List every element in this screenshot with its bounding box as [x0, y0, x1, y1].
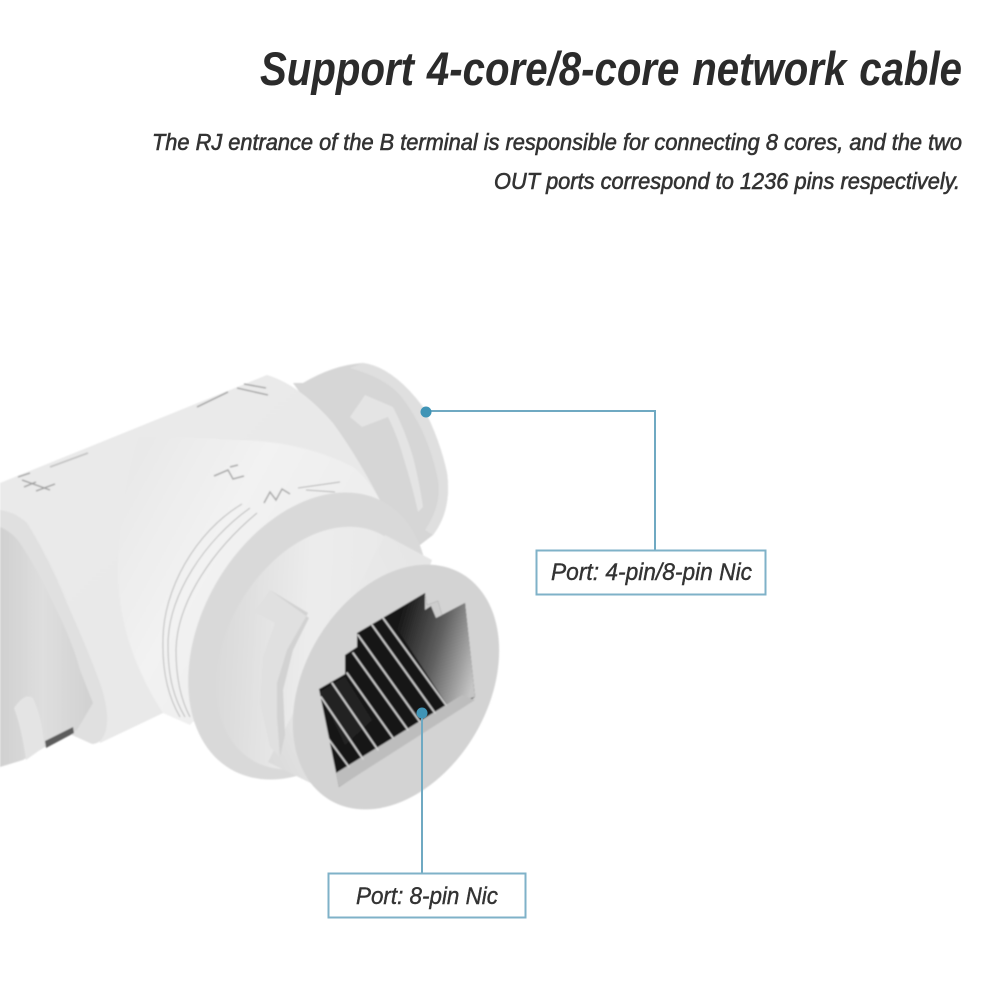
- callout: 4-pin/8-pin port: Port: 4-pin/8-pin Nic: [551, 559, 752, 586]
- callout: 4-pin/8-pin port: [420, 406, 766, 594]
- contact pins: [321, 618, 446, 767]
- front clip: [255, 590, 308, 757]
- back port: [293, 363, 448, 545]
- description text: [152, 129, 962, 194]
- description text: The RJ entrance of the B terminal is responsible for connecting 8 cores, and the two: [152, 129, 962, 155]
- engraved markings: [18, 384, 290, 503]
- rj45 socket: [319, 593, 475, 787]
- main tube body: [0, 375, 385, 743]
- product: white T-shaped RJ45 connector: [0, 363, 541, 846]
- front port face: [251, 528, 541, 846]
- marker dot: [420, 406, 432, 418]
- front port flange: [139, 450, 477, 822]
- callout: 8-pin port: [328, 708, 526, 918]
- front tube branch: [118, 437, 385, 725]
- left clip: [14, 696, 44, 760]
- left port flange: [0, 510, 107, 767]
- description text: OUT ports correspond to 1236 pins respectively.: [494, 168, 960, 194]
- engraved rings: [163, 482, 340, 717]
- marker dot: [416, 708, 428, 718]
- front port neck: [175, 490, 461, 806]
- callout: 8-pin port: Port: 8-pin Nic: [356, 883, 498, 910]
